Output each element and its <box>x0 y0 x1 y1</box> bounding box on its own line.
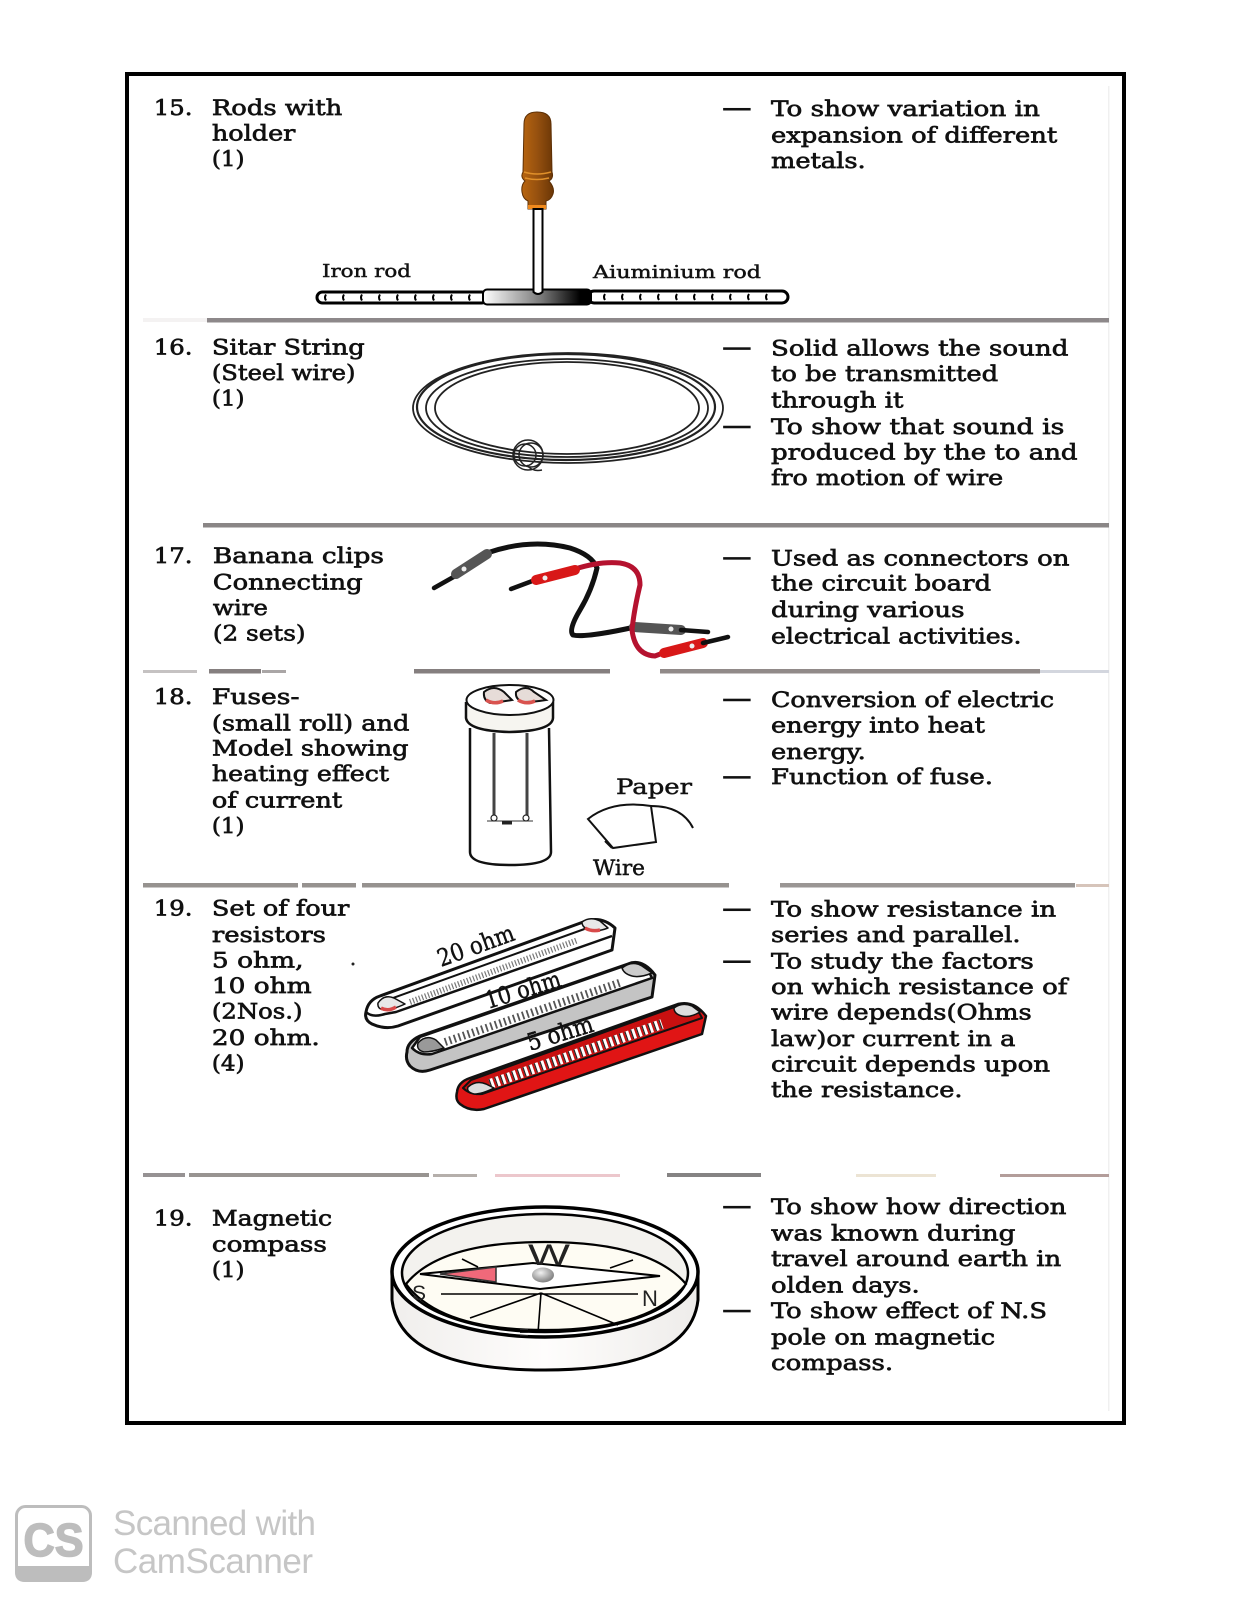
text: compass uses: was known during <box>771 1222 1015 1247</box>
text: resistor set name: (2Nos.) <box>212 1000 302 1025</box>
panel 18: fuses <box>154 685 1054 880</box>
compass letter W: W <box>528 1239 571 1272</box>
label: 10 ohm: 10 ohm <box>482 965 565 1015</box>
text: resistor set name: 10 ohm <box>212 974 312 999</box>
text: resistor set name: resistors <box>212 923 326 948</box>
text: compass name: Magnetic <box>212 1206 332 1231</box>
text: compass uses: travel around earth in <box>771 1247 1061 1272</box>
text: item 15 use: metals. <box>771 149 866 174</box>
text: item 18 uses: Function of fuse. <box>771 765 993 790</box>
text: compass name: (1) <box>212 1258 244 1283</box>
text: item 18 uses: Conversion of electric <box>771 688 1054 713</box>
text: item 17 name: 17. <box>154 544 192 569</box>
illustration: coiled steel wire <box>413 353 723 470</box>
text: item 15 use <box>723 97 1057 174</box>
text: resistor set uses: To study the factors <box>771 950 1034 975</box>
watermark: CamScanner logo: CS <box>24 1514 84 1566</box>
text: item 17 name: (2 sets) <box>213 622 306 647</box>
text: resistor set uses: series and parallel. <box>771 923 1021 948</box>
compass letter S: S <box>412 1282 426 1305</box>
text: item 15 name: holder <box>212 122 296 147</box>
text: item 18 name: Model showing <box>212 737 408 762</box>
text: compass uses: pole on magnetic <box>771 1325 995 1350</box>
text: item 15 name: 15. <box>154 96 192 121</box>
text: item 17 use: the circuit board <box>771 572 991 597</box>
compass letter N: N <box>642 1286 658 1311</box>
text: compass uses: To show effect of N.S <box>771 1299 1047 1324</box>
text: item 17 use: electrical activities. <box>771 625 1022 650</box>
text: item 18 uses: energy into heat <box>771 713 985 738</box>
text: compass uses: olden days. <box>771 1273 920 1298</box>
text: compass uses: To show how direction <box>771 1195 1066 1220</box>
text: resistor set uses <box>723 898 1070 1103</box>
text: resistor set uses: wire depends(Ohms <box>771 1001 1032 1026</box>
text: item 17 use <box>723 546 1069 650</box>
text: item 16 name: Sitar String <box>212 335 365 360</box>
text: compass uses: compass. <box>771 1351 893 1376</box>
text: resistor set name: 5 ohm, <box>212 949 304 974</box>
text: item 18 uses: energy. <box>771 740 866 765</box>
text: item 18 uses <box>723 688 1054 790</box>
text: item 17 name: wire <box>213 596 268 621</box>
text: item 16 name: (1) <box>212 386 244 411</box>
label: paper: Paper <box>616 775 693 799</box>
label: iron rod: Iron rod <box>322 261 411 282</box>
text: compass uses <box>723 1195 1066 1376</box>
illustration: rods with holder <box>317 112 788 304</box>
label: aluminium rod: Aiuminium rod <box>592 262 761 283</box>
text: item 17 use: Used as connectors on <box>771 546 1069 571</box>
table frame <box>127 74 1124 1423</box>
text: item 16 uses: to be transmitted <box>771 362 998 387</box>
text: resistor set uses: law)or current in a <box>771 1027 1015 1052</box>
text: compass name <box>154 1206 332 1283</box>
text: resistor set name: 19. <box>154 897 192 922</box>
label: wire: Wire <box>593 856 645 880</box>
text: resistor set name: (4) <box>212 1051 244 1076</box>
panel 19: set of four resistors <box>154 897 1070 1110</box>
watermark: scanned with: Scanned with <box>113 1504 316 1543</box>
illustration: fuse model jar <box>466 685 554 865</box>
text: item 18 name: 18. <box>154 685 192 710</box>
text: resistor set uses: To show resistance in <box>771 898 1056 923</box>
label: 20 ohm: 20 ohm <box>433 919 518 973</box>
text: item 15 name <box>154 96 342 172</box>
panel 16: sitar string <box>154 335 1078 491</box>
text: resistor set name <box>154 897 350 1076</box>
text: resistor set uses: the resistance. <box>771 1078 962 1103</box>
text: item 18 name: (small roll) and <box>212 711 409 736</box>
text: compass name: compass <box>212 1233 327 1258</box>
label: 5 ohm: 5 ohm <box>524 1010 597 1057</box>
panel 19b: magnetic compass <box>154 1195 1066 1376</box>
illustration: magnetic compass <box>392 1207 698 1370</box>
text: item 16 uses: fro motion of wire <box>771 466 1003 491</box>
text: item 16 uses: Solid allows the sound <box>771 336 1068 361</box>
text: resistor set uses: circuit depends upon <box>771 1052 1050 1077</box>
illustration: 5 ohm resistor <box>456 1003 706 1110</box>
text: item 18 name: heating effect <box>212 762 389 787</box>
text: item 16 uses: produced by the to and <box>771 440 1078 465</box>
text: compass name: 19. <box>154 1206 192 1231</box>
text: item 16 uses <box>723 336 1078 491</box>
text: resistor set name: 20 ohm. <box>212 1026 320 1051</box>
watermark: CamScanner logo <box>15 1506 92 1582</box>
illustration: connecting wires <box>434 544 728 656</box>
text: item 18 name: Fuses- <box>212 685 299 710</box>
illustration: 20 ohm resistor <box>366 919 615 1028</box>
text: item 15 name: (1) <box>212 147 244 172</box>
text: item 18 name: (1) <box>212 814 244 839</box>
text: resistor set name: Set of four <box>212 897 350 922</box>
text: item 15 use: To show variation in <box>771 97 1040 122</box>
text: item 16 name <box>154 335 365 411</box>
text: item 18 name: of current <box>212 789 342 814</box>
panel 15: rods with holder <box>154 96 1057 304</box>
text: item 17 name <box>154 544 384 647</box>
text: item 16 uses: through it <box>771 388 904 413</box>
illustration: 10 ohm resistor <box>406 962 655 1071</box>
text: item 15 name: Rods with <box>212 96 342 121</box>
text: item 18 name <box>154 685 409 839</box>
text: item 16 name: (Steel wire) <box>212 361 355 386</box>
text: item 16 uses: To show that sound is <box>771 415 1064 440</box>
panel 17: banana clips <box>154 544 1069 656</box>
text: item 15 use: expansion of different <box>771 124 1057 149</box>
text: item 17 use: during various <box>771 598 965 623</box>
text: item 17 name: Connecting <box>213 571 363 596</box>
text: resistor set uses: on which resistance of <box>771 975 1070 1000</box>
illustration: paper and wire fuse <box>588 805 693 848</box>
text: item 16 name: 16. <box>154 335 192 360</box>
watermark: CamScanner: CamScanner <box>113 1542 313 1581</box>
text: item 17 name: Banana clips <box>213 544 384 569</box>
